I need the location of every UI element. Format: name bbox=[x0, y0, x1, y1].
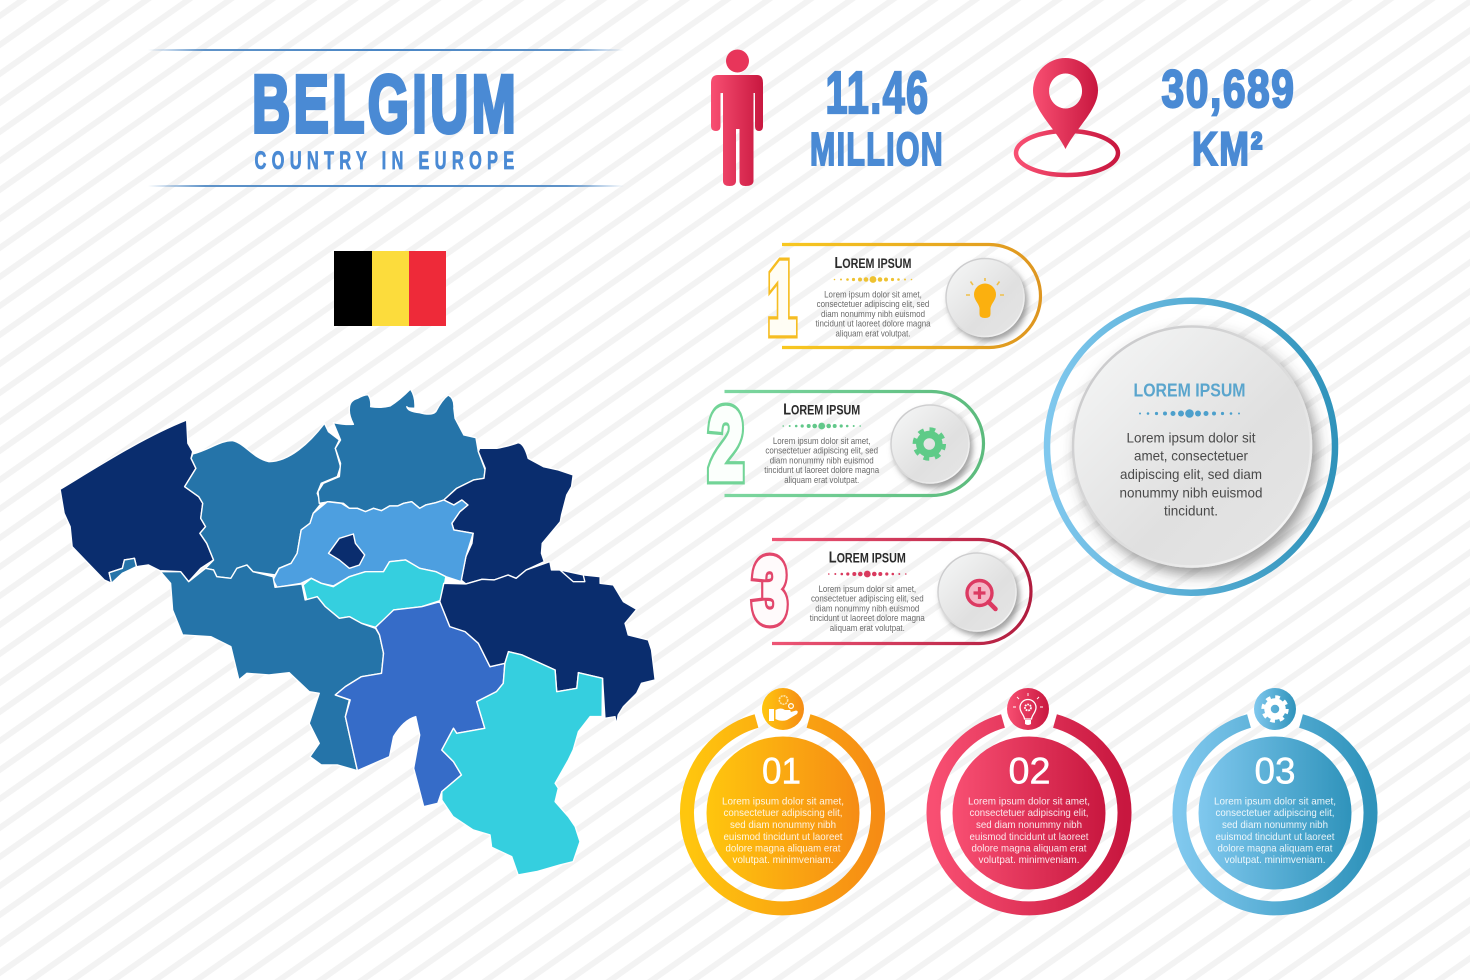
body text: sed diam nonummy nibh bbox=[976, 819, 1082, 831]
dots bbox=[782, 423, 861, 429]
card 1 bbox=[768, 242, 1040, 354]
icon badge: gear bbox=[1254, 688, 1296, 730]
title block bbox=[148, 49, 624, 187]
number 1 bbox=[768, 242, 796, 354]
dots bbox=[1139, 409, 1240, 418]
outer ring bbox=[1047, 301, 1335, 593]
number 2 bbox=[708, 388, 744, 500]
icon badge: hand with gears bbox=[762, 688, 804, 730]
number 3: 3 bbox=[753, 542, 787, 642]
body text: dolore magna aliquam erat bbox=[1218, 842, 1333, 854]
body text: consectetuer adipiscing elit, sed bbox=[817, 299, 929, 309]
body text: consectetuer adipiscing elit, bbox=[1216, 807, 1334, 819]
body text bbox=[1214, 796, 1336, 866]
body text bbox=[1120, 430, 1262, 518]
body text: Lorem ipsum dolor sit amet, bbox=[722, 796, 844, 808]
number 1: 1 bbox=[768, 242, 796, 354]
heading: LOREM IPSUM bbox=[834, 255, 912, 272]
body text: Lorem ipsum dolor sit amet, bbox=[968, 796, 1090, 808]
step 03 bbox=[1180, 688, 1370, 908]
number 2: 2 bbox=[708, 388, 744, 500]
dots bbox=[834, 276, 912, 283]
button disc bbox=[891, 405, 969, 483]
unit: MILLION bbox=[810, 123, 944, 175]
body text: sed diam nonummy nibh bbox=[1222, 819, 1328, 831]
body text: tincidunt. bbox=[1164, 502, 1218, 518]
region: Luxembourg bbox=[442, 652, 603, 875]
unit: KM² bbox=[1192, 122, 1264, 175]
body text: consectetuer adipiscing elit, sed bbox=[765, 446, 878, 456]
body text: volutpat. minimveniam. bbox=[978, 854, 1080, 866]
disc bbox=[706, 736, 860, 890]
flag of Belgium bbox=[334, 251, 446, 326]
icon: gear bbox=[915, 430, 944, 458]
stat: population bbox=[711, 50, 944, 186]
body text: euismod tincidunt ut laoreet bbox=[724, 831, 843, 843]
number 3 bbox=[753, 542, 787, 642]
body text: tincidunt ut laoreet dolore magna bbox=[810, 613, 925, 623]
dots bbox=[828, 571, 907, 577]
region: Liège bbox=[440, 562, 655, 725]
heading: LOREM IPSUM bbox=[783, 402, 860, 419]
body text: euismod tincidunt ut laoreet bbox=[1216, 831, 1335, 843]
body text: aliquam erat volutpat. bbox=[784, 475, 859, 485]
number: 03 bbox=[1254, 750, 1296, 792]
body text: consectetuer adipiscing elit, sed bbox=[811, 594, 924, 604]
body text: sed diam nonummy nibh bbox=[730, 819, 836, 831]
button disc bbox=[938, 553, 1016, 631]
body text: tincidunt ut laoreet dolore magna bbox=[816, 318, 931, 328]
icon: person bbox=[711, 50, 763, 186]
body text: dolore magna aliquam erat bbox=[726, 842, 841, 854]
icon: magnifier bbox=[967, 580, 996, 609]
body text: Lorem ipsum dolor sit bbox=[1126, 430, 1256, 446]
body text: euismod tincidunt ut laoreet bbox=[970, 831, 1089, 843]
body text: Lorem ipsum dolor sit amet, bbox=[818, 584, 916, 594]
region: Antwerp bbox=[318, 389, 485, 512]
body text bbox=[810, 584, 925, 633]
card 3 bbox=[753, 540, 1031, 644]
body text bbox=[764, 436, 880, 485]
disc bbox=[952, 736, 1106, 890]
subtitle: COUNTRY IN EUROPE bbox=[254, 147, 520, 175]
body text: consectetuer adipiscing elit, bbox=[970, 807, 1088, 819]
button disc bbox=[946, 258, 1024, 336]
title: BELGIUM bbox=[252, 59, 519, 150]
region: West Flanders bbox=[60, 420, 214, 583]
body text: volutpat. minimveniam. bbox=[732, 854, 834, 866]
body text bbox=[816, 290, 931, 338]
body text: Lorem ipsum dolor sit amet, bbox=[824, 290, 922, 300]
region: East Flanders bbox=[185, 423, 341, 578]
ring bbox=[687, 721, 878, 908]
map of Belgium bbox=[60, 389, 655, 875]
body text: dolore magna aliquam erat bbox=[972, 842, 1087, 854]
step 01 bbox=[687, 688, 878, 908]
body text bbox=[968, 796, 1090, 866]
number 1: 1 bbox=[768, 242, 796, 354]
region: Zwin enclave bbox=[109, 558, 136, 583]
number: 01 bbox=[762, 750, 801, 792]
region: Limburg bbox=[444, 443, 573, 584]
value: 11.46 bbox=[826, 60, 930, 126]
number: 02 bbox=[1008, 750, 1050, 792]
body text: aliquam erat volutpat. bbox=[836, 328, 910, 338]
region: Voeren enclave bbox=[560, 570, 585, 582]
inner disc bbox=[1073, 326, 1311, 566]
region: Flemish Brabant bbox=[273, 500, 473, 587]
body text: diam nonummy nibh euismod bbox=[815, 604, 919, 614]
body text: diam nonummy nibh euismod bbox=[821, 309, 925, 319]
body text: Lorem ipsum dolor sit amet, bbox=[773, 436, 871, 446]
body text: amet, consectetuer bbox=[1134, 448, 1248, 464]
callout: large circle bbox=[1047, 301, 1335, 593]
body text: tincidunt ut laoreet dolore magna bbox=[764, 465, 880, 475]
heading: LOREM IPSUM bbox=[1134, 380, 1246, 400]
ring bbox=[934, 721, 1124, 908]
body text: volutpat. minimveniam. bbox=[1224, 854, 1326, 866]
step 02 bbox=[934, 688, 1124, 908]
body text: aliquam erat volutpat. bbox=[830, 623, 905, 633]
body text: Lorem ipsum dolor sit amet, bbox=[1214, 796, 1336, 808]
region: Hainaut bbox=[161, 565, 384, 771]
region: Brussels bbox=[328, 534, 365, 568]
icon: location pin bbox=[1016, 58, 1118, 175]
body text: adipiscing elit, sed diam bbox=[1120, 466, 1262, 482]
body text: diam nonummy nibh euismod bbox=[770, 456, 874, 466]
ring bbox=[1180, 721, 1370, 908]
stat: area bbox=[1016, 58, 1296, 175]
body text: consectetuer adipiscing elit, bbox=[724, 807, 842, 819]
region: Walloon Brabant bbox=[303, 560, 446, 627]
number 3: 3 bbox=[753, 542, 787, 642]
disc bbox=[1198, 736, 1352, 890]
card 2 bbox=[708, 388, 984, 500]
body text: nonummy nibh euismod bbox=[1120, 484, 1262, 500]
icon badge: bulb with gear bbox=[1007, 688, 1049, 730]
value: 30,689 bbox=[1162, 60, 1296, 119]
region: Namur bbox=[335, 602, 505, 807]
body text bbox=[722, 796, 844, 866]
heading: LOREM IPSUM bbox=[829, 550, 906, 566]
icon: light bulb bbox=[966, 278, 1004, 318]
number 2: 2 bbox=[708, 388, 744, 500]
